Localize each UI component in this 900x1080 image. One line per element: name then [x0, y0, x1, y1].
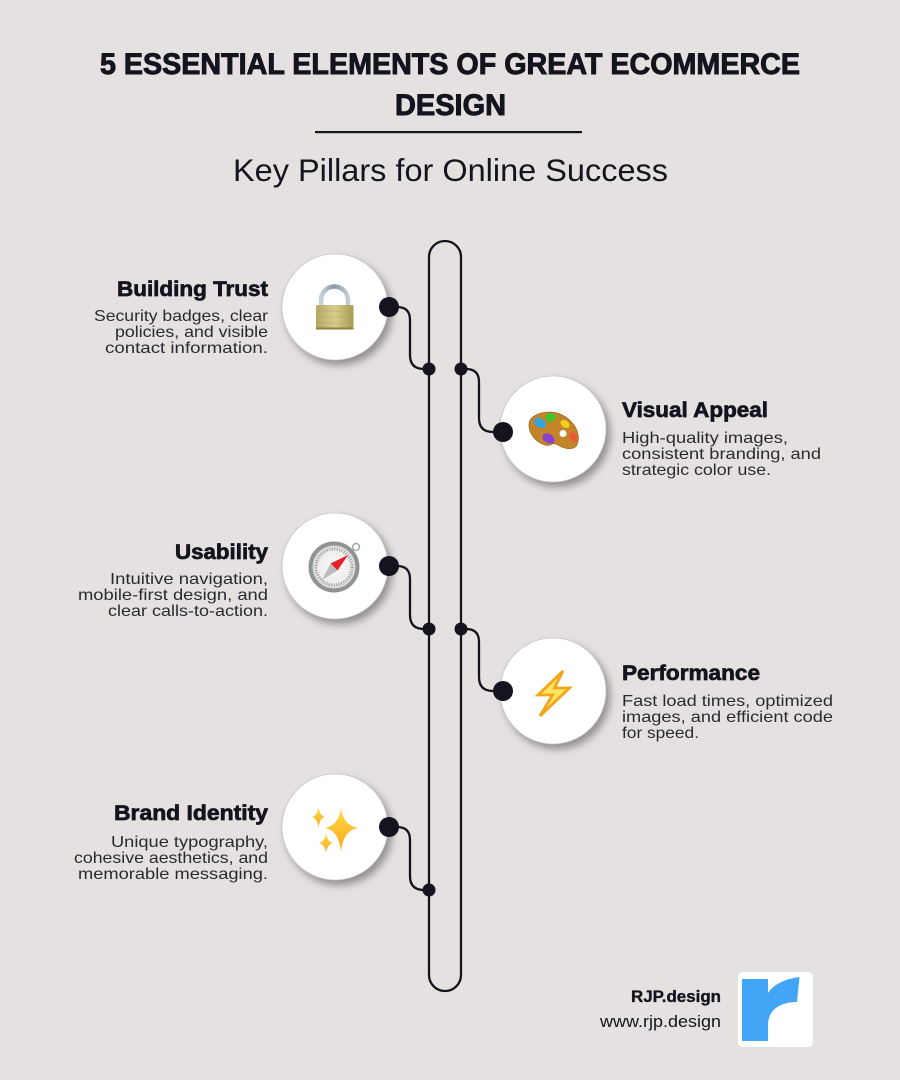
text: usability description: mobile-first design, and [78, 587, 268, 604]
panel: building trust [94, 254, 436, 376]
heading: visual appeal: Visual Appeal [622, 398, 768, 422]
title [100, 48, 800, 122]
panel: brand identity [74, 774, 436, 896]
footer brand text: www.rjp.design [599, 1012, 721, 1031]
text: performance description: images, and efficient code [622, 709, 833, 726]
text: brand identity description: cohesive aesthetics, and [74, 850, 268, 867]
subtitle: Key Pillars for Online Success [233, 152, 668, 188]
connector: building trust [379, 297, 436, 376]
text: usability description: Intuitive navigation, [110, 571, 268, 588]
text: building trust description: Security badges, clear [94, 308, 269, 325]
text: building trust description [94, 308, 269, 357]
text: visual appeal description: High-quality images, [622, 430, 788, 447]
text: brand identity description: memorable messaging. [78, 866, 268, 883]
heading: performance: Performance [622, 661, 760, 685]
text: usability description [78, 571, 268, 620]
connector: brand identity [379, 817, 436, 896]
text: brand identity description [74, 834, 268, 883]
panel: visual appeal [454, 362, 821, 482]
title: 5 ESSENTIAL ELEMENTS OF GREAT ECOMMERCE [100, 48, 800, 81]
panel: usability [78, 513, 436, 636]
connector: visual appeal [454, 362, 513, 442]
heading: building trust: Building Trust [117, 277, 268, 301]
icon: paint palette [529, 412, 579, 449]
connector: usability [379, 556, 436, 636]
text: performance description [622, 693, 833, 742]
logo [738, 972, 813, 1047]
text: performance description: for speed. [622, 725, 699, 742]
icon: lightning bolt [538, 671, 570, 716]
heading: brand identity: Brand Identity [114, 801, 268, 825]
text: performance description: Fast load times, optimized [622, 693, 833, 710]
heading: usability: Usability [175, 540, 268, 564]
icon: compass [310, 544, 360, 590]
icon circle: visual appeal [500, 376, 606, 482]
icon circle: performance [500, 638, 606, 744]
text: visual appeal description: strategic color use. [622, 462, 771, 479]
text: visual appeal description [622, 430, 821, 479]
text: brand identity description: Unique typography, [111, 834, 268, 851]
connector: performance [454, 622, 513, 701]
icon circle: building trust [282, 254, 388, 360]
text: building trust description: policies, and visible [115, 324, 268, 341]
icon circle: brand identity [282, 774, 388, 880]
icon circle: usability [282, 513, 388, 619]
text: visual appeal description: consistent branding, and [622, 446, 821, 463]
icon: sparkles [312, 807, 358, 853]
text: building trust description: contact information. [105, 340, 268, 357]
footer brand text [599, 988, 721, 1031]
icon: padlock [316, 286, 354, 330]
panel: performance [454, 622, 833, 744]
central timeline track [429, 241, 461, 991]
text: usability description: clear calls-to-action. [108, 603, 268, 620]
title: DESIGN [395, 89, 506, 122]
footer brand text: RJP.design [631, 988, 721, 1006]
